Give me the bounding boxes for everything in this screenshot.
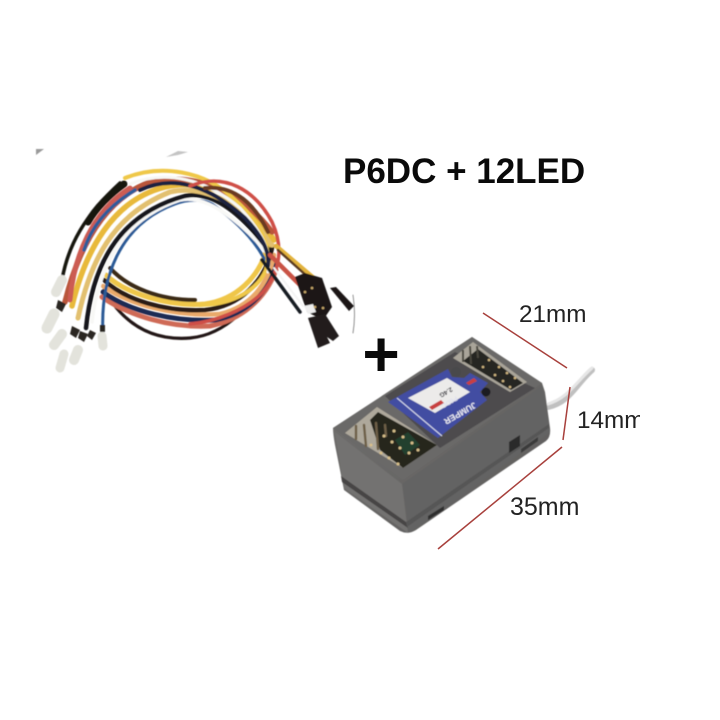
left socket well	[345, 407, 437, 468]
label text: 2.4G: 2.4G	[438, 385, 454, 398]
dimension line: height	[563, 387, 570, 440]
upper loop wires	[62, 171, 279, 335]
wires into connectors	[262, 246, 316, 312]
label: 21mm: 21mm	[519, 301, 587, 328]
photo: LED wire harness	[36, 149, 354, 368]
label text: P6DC: P6DC	[440, 394, 458, 409]
right socket well	[453, 342, 527, 392]
title: P6DC + 12LED	[343, 152, 585, 191]
right face	[402, 386, 550, 532]
dimension line: width	[483, 313, 567, 368]
case body	[333, 337, 550, 533]
blue label	[388, 367, 490, 438]
plus sign: +	[362, 318, 400, 390]
label text: JUMPER: JUMPER	[442, 400, 478, 427]
top face	[333, 337, 542, 480]
front face	[335, 432, 408, 533]
LED caps	[56, 300, 105, 342]
label: 35mm: 35mm	[510, 493, 579, 521]
LED bulbs	[47, 280, 103, 368]
dimension line: length	[438, 447, 562, 549]
photo corner artifacts	[36, 149, 354, 333]
photo: receiver	[333, 337, 592, 533]
antenna	[548, 368, 592, 407]
connectors	[295, 273, 354, 348]
label: 14mm: 14mm	[577, 407, 645, 434]
lower loop wires	[102, 245, 276, 338]
